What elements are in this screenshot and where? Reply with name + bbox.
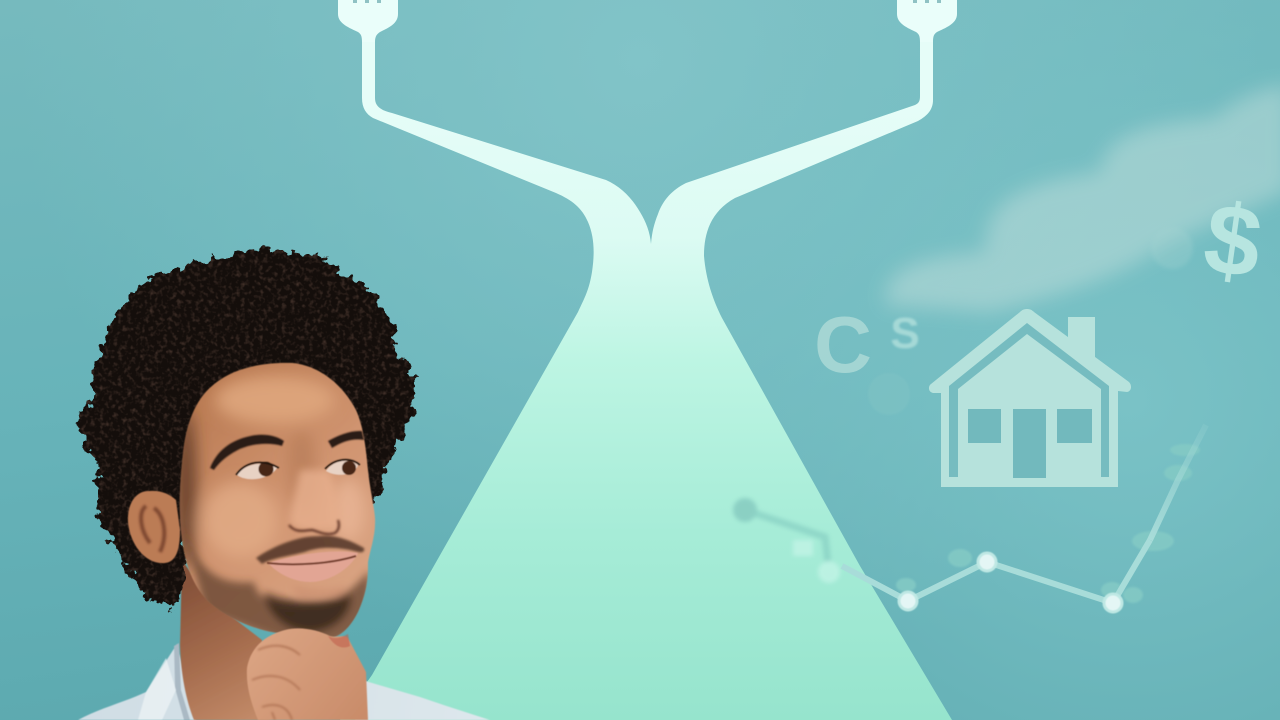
faded chart segment on road — [733, 498, 840, 583]
cloud haze — [885, 85, 1280, 312]
line chart — [733, 425, 1206, 612]
chart line fading rise — [1150, 425, 1206, 540]
beard stubble — [188, 544, 368, 637]
ghost markers — [896, 444, 1200, 603]
fork head: left — [338, 0, 398, 42]
chimney — [1068, 317, 1095, 359]
window right — [1057, 409, 1092, 443]
neck — [180, 560, 270, 720]
person thinking — [78, 249, 490, 720]
icon: faint coin right — [1151, 227, 1193, 269]
eyebrow left — [210, 435, 284, 470]
main chart line — [842, 540, 1150, 603]
road body — [340, 30, 952, 720]
door — [1013, 409, 1046, 478]
icon: faint coin left — [868, 373, 910, 415]
road splitting into two forks — [338, 0, 957, 720]
icon: currency letter C: C — [814, 300, 872, 389]
eye right — [325, 460, 360, 475]
shirt — [78, 643, 490, 720]
face shading — [176, 376, 370, 645]
eyebrow right — [328, 431, 364, 448]
face — [176, 363, 375, 645]
lips — [267, 551, 358, 582]
hair — [78, 249, 416, 610]
gap between roof and wall — [949, 323, 1109, 477]
icon: dollar sign: $ — [1198, 182, 1268, 300]
nose — [289, 470, 340, 534]
ear — [128, 491, 180, 563]
hand on chin — [247, 628, 368, 720]
roof — [929, 309, 1131, 487]
eye left — [236, 462, 279, 479]
icon: small currency sign: S — [890, 309, 920, 358]
icon: house — [929, 309, 1131, 487]
fork head: right — [897, 0, 957, 42]
window left — [968, 409, 1001, 443]
data points — [899, 553, 1122, 612]
moustache — [256, 536, 364, 564]
